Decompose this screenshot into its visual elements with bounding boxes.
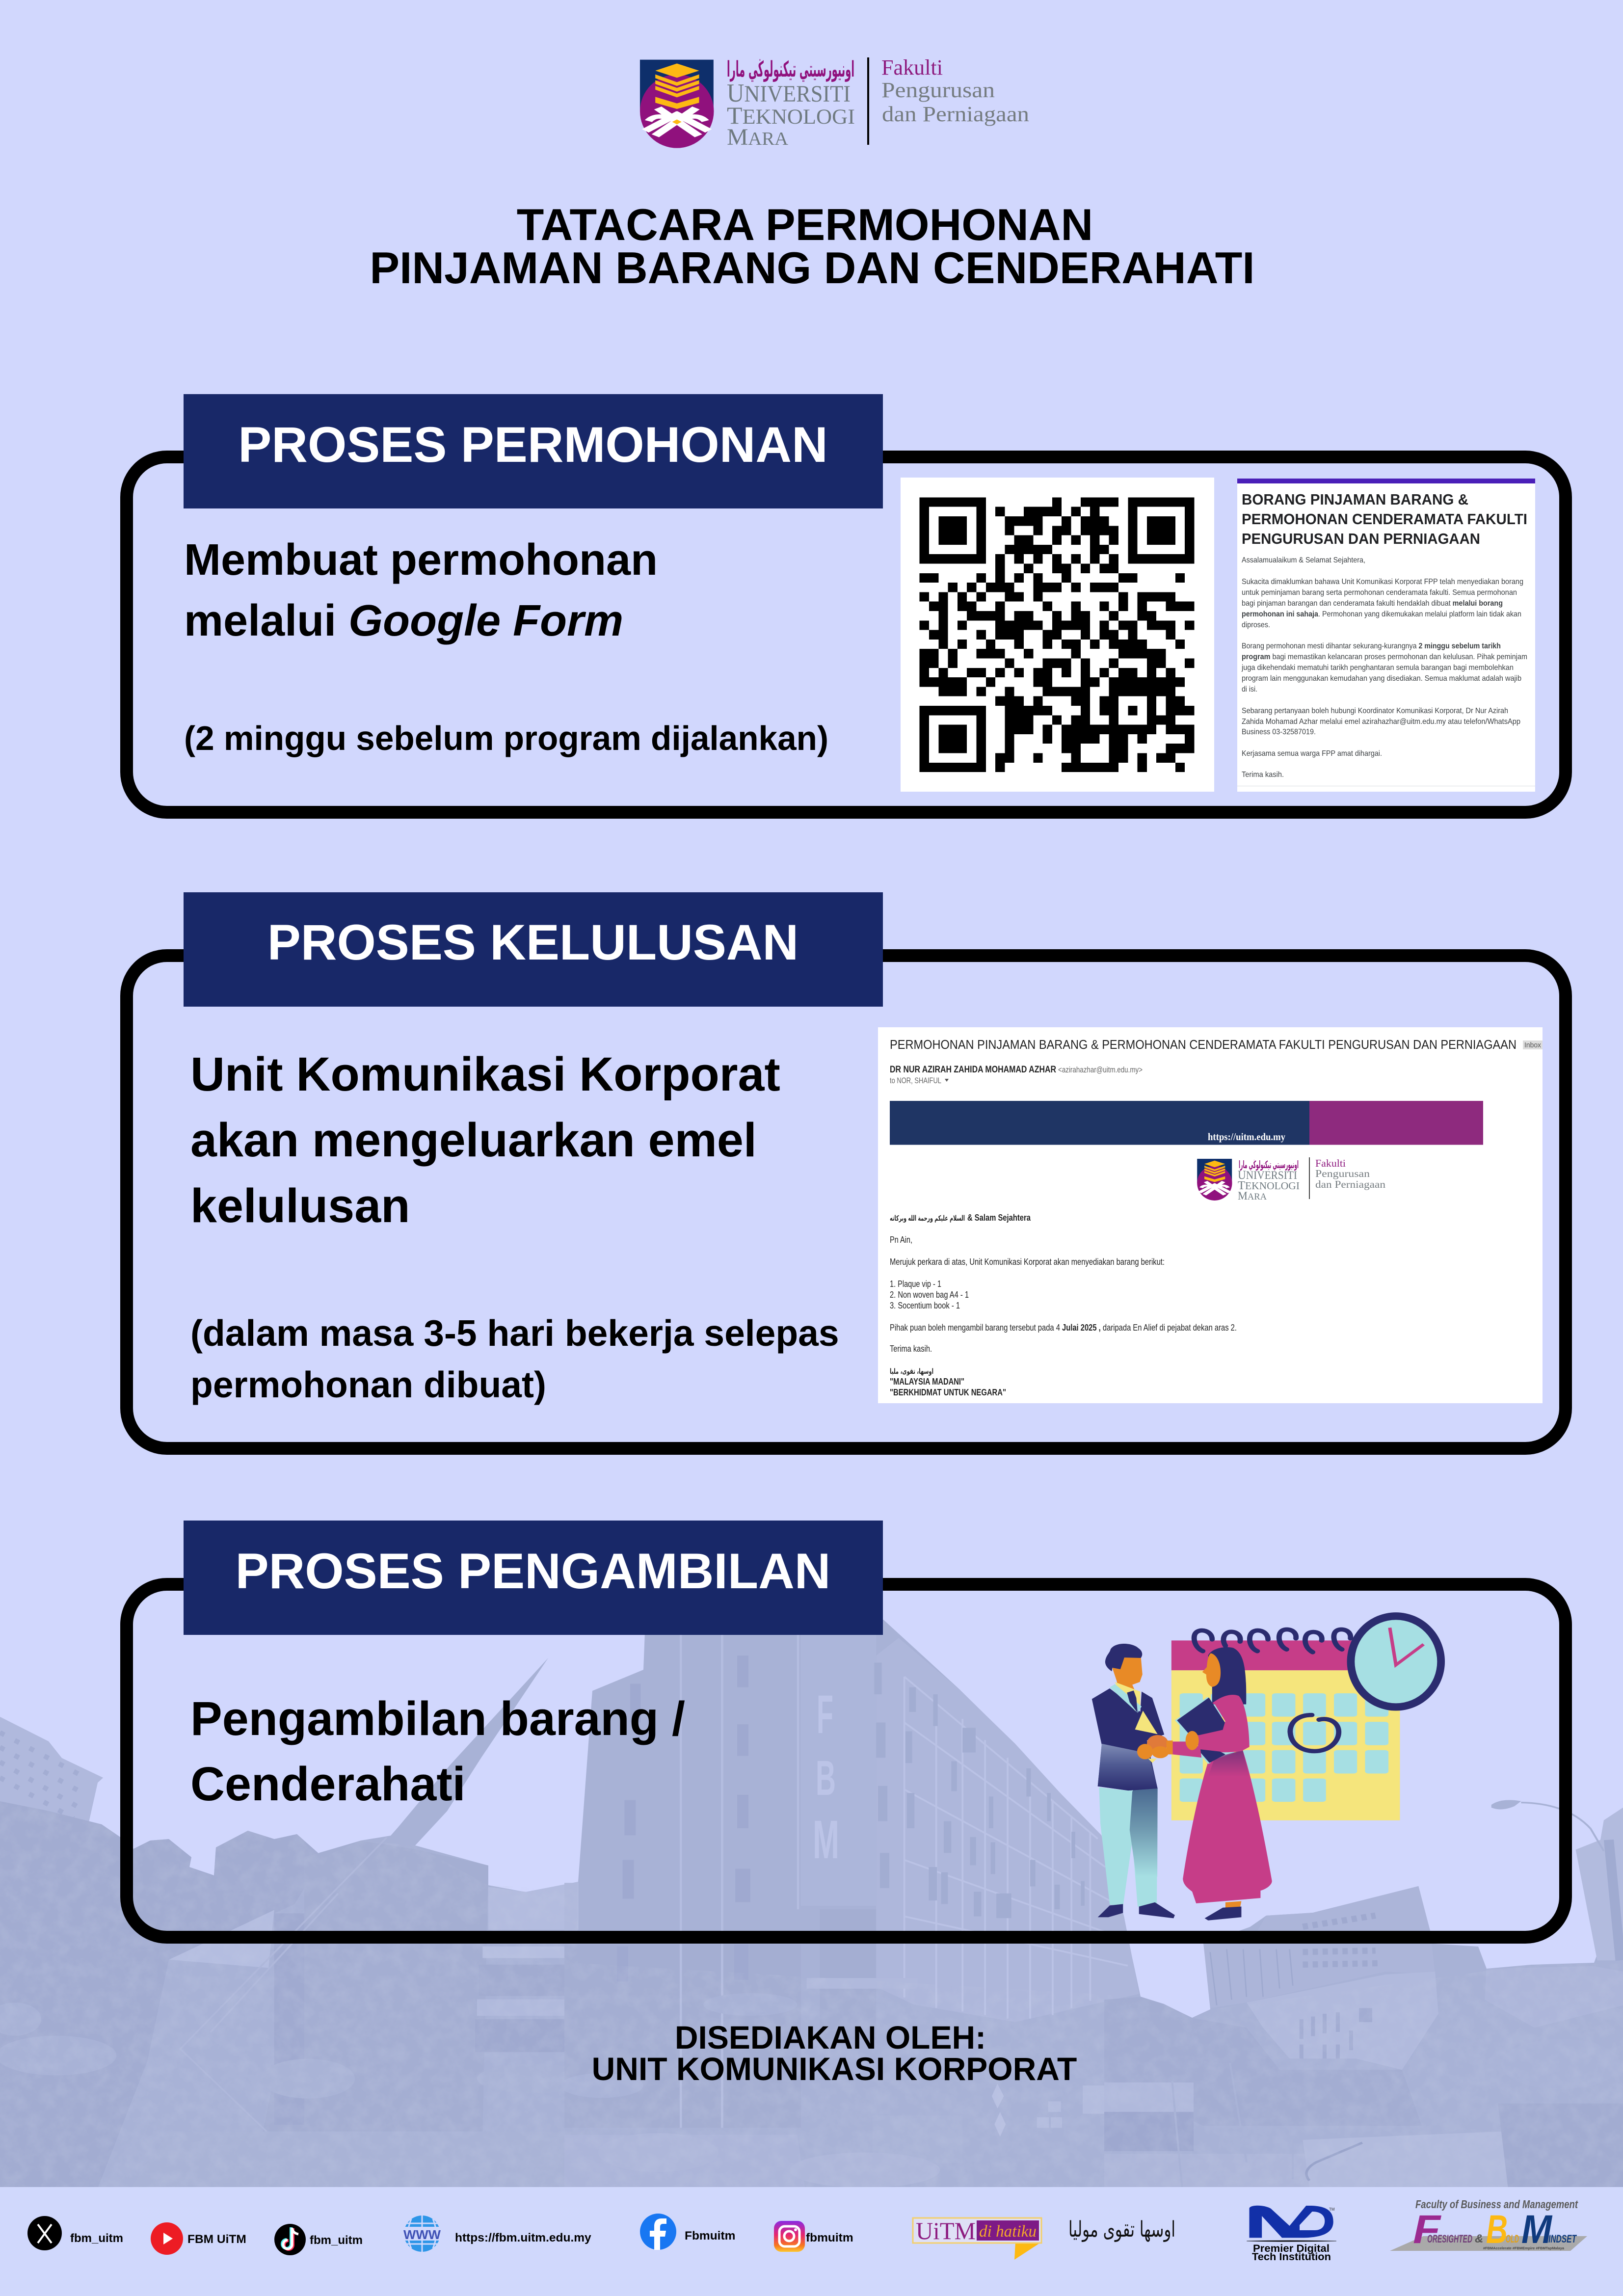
text: kelulusan instructions: kelulusan xyxy=(190,1179,410,1232)
social: Instagram: fbmuitm xyxy=(806,2231,853,2244)
FBM letters on building: F xyxy=(817,1684,833,1745)
form screenshot: program lain menggunakan kemudahan yang disediakan. Semua maklumat adalah wajib xyxy=(1242,674,1521,683)
logo: Foresighted and Bold Mindset xyxy=(1390,2198,1587,2252)
logo: UiTM di hatiku xyxy=(913,2217,1041,2260)
figure: woman xyxy=(1172,1647,1272,1921)
logo: Foresighted and Bold Mindset: B xyxy=(1486,2207,1508,2252)
form screenshot: di isi. xyxy=(1242,685,1257,694)
icon: email logo: Pengurusan xyxy=(1315,1168,1370,1179)
email banner: https://uitm.edu.my xyxy=(1208,1131,1285,1143)
email screenshot: PERMOHONAN PINJAMAN BARANG & PERMOHONAN CENDERAMATA FAKULTI PENGURUSAN DAN PERNIAGAAN xyxy=(890,1037,1517,1052)
text: permohonan instructions: melalui Google Form xyxy=(184,596,623,645)
credit: disediakan oleh: DISEDIAKAN OLEH: xyxy=(675,2019,986,2056)
text: pengambilan barang xyxy=(190,1692,685,1811)
icon: email logo: TEKNOLOGI xyxy=(1238,1179,1300,1192)
email body: Merujuk perkara di atas, Unit Komunikasi Korporat akan menyediakan barang berikut: xyxy=(890,1257,1165,1267)
text: pengambilan barang: Cenderahati xyxy=(190,1757,466,1811)
icon: email logo: dan Perniagaan xyxy=(1315,1178,1386,1190)
icon: email logo: MARA xyxy=(1238,1190,1267,1202)
social: Facebook xyxy=(640,2214,735,2250)
logo: UiTM Fakulti Pengurusan dan Perniagaan: TEKNOLOGI xyxy=(727,102,855,129)
social: website: WWW xyxy=(403,2227,441,2242)
logo: UiTM Fakulti Pengurusan dan Perniagaan: UNIVERSITI xyxy=(727,79,851,107)
email body: & Salam Sejahtera xyxy=(967,1213,1031,1223)
logo: UiTM Fakulti Pengurusan dan Perniagaan xyxy=(640,55,1029,150)
text: kelulusan instructions xyxy=(190,1047,839,1405)
email body: 3. Socentium book - 1 xyxy=(890,1301,960,1310)
form screenshot: diproses. xyxy=(1242,621,1270,629)
icon: email logo xyxy=(1197,1157,1386,1202)
social: TikTok: fbm_uitm xyxy=(310,2234,363,2247)
logo: UiTM Fakulti Pengurusan dan Perniagaan: dan Perniagaan xyxy=(882,102,1029,126)
form screenshot: Sukacita dimaklumkan bahawa Unit Komunikasi Korporat FPP telah menyediakan borang xyxy=(1242,578,1523,586)
email screenshot: to NOR, SHAIFUL xyxy=(890,1076,941,1085)
social: YouTube xyxy=(151,2222,246,2255)
form screenshot: Kerjasama semua warga FPP amat dihargai. xyxy=(1242,749,1382,758)
form screenshot: program bagi memastikan kelancaran proses permohonan dan kelulusan. Pihak peminjam xyxy=(1242,653,1527,661)
FBM letters on building: M xyxy=(813,1810,839,1870)
email banner xyxy=(890,1101,1483,1145)
icon: UiTM shield xyxy=(640,60,714,148)
text: permohonan instructions: Membuat permohonan xyxy=(184,535,658,585)
form screenshot: PENGURUSAN DAN PERNIAGAAN xyxy=(1242,530,1480,547)
logo: Foresighted and Bold Mindset: Faculty of Business and Management xyxy=(1415,2198,1578,2211)
figure: man xyxy=(1092,1644,1175,1918)
social: website xyxy=(402,2216,591,2252)
text: kelulusan instructions: permohonan dibuat) xyxy=(190,1364,546,1405)
heading tab: proses kelulusan: PROSES KELULUSAN xyxy=(267,914,798,970)
form screenshot xyxy=(1237,479,1535,792)
logo: MD Premier Digital Tech Institution: Premier Digital xyxy=(1253,2243,1330,2254)
form screenshot: Zahida Mohamad Azhar melalui emel azirahazhar@uitm.edu.my atau telefon/WhatsApp xyxy=(1242,718,1520,726)
panel: proses pengambilan xyxy=(127,1521,1566,1937)
logo: UiTM Fakulti Pengurusan dan Perniagaan: MARA xyxy=(727,124,789,150)
icon: handshake xyxy=(1137,1731,1199,1759)
title: PINJAMAN BARANG DAN CENDERAHATI xyxy=(370,243,1255,293)
background photo: FBM building and campus xyxy=(0,1620,1623,2188)
form screenshot: PERMOHONAN CENDERAMATA FAKULTI xyxy=(1242,510,1527,528)
email body xyxy=(890,1213,1237,1397)
centre crop details xyxy=(564,1635,1128,2136)
logo: Foresighted and Bold Mindset: INDSET xyxy=(1548,2233,1577,2245)
panel: proses kelulusan xyxy=(127,892,1566,1448)
logo: Foresighted and Bold Mindset: OLD xyxy=(1506,2233,1519,2245)
email body: "MALAYSIA MADANI" xyxy=(890,1377,964,1387)
logo: MD Premier Digital Tech Institution: TM xyxy=(1329,2207,1335,2212)
logo: Foresighted and Bold Mindset: ORESIGHTED xyxy=(1427,2233,1472,2245)
right crop details xyxy=(1104,1800,1623,2187)
text: permohonan instructions xyxy=(184,535,828,757)
social: Facebook: Fbmuitm xyxy=(685,2229,735,2243)
social: YouTube: FBM UiTM xyxy=(187,2233,246,2246)
logo: UiTM Fakulti Pengurusan dan Perniagaan: Pengurusan xyxy=(881,78,995,102)
text: kelulusan instructions: (dalam masa 3-5 hari bekerja selepas xyxy=(190,1312,839,1354)
heading tab: proses permohonan: PROSES PERMOHONAN xyxy=(238,417,828,473)
logo: UiTM di hatiku: UiTM xyxy=(916,2217,976,2244)
icon: email logo: Fakulti xyxy=(1315,1157,1346,1169)
FBM letters on building: B xyxy=(816,1751,836,1806)
form screenshot: Assalamualaikum & Selamat Sejahtera, xyxy=(1242,556,1365,564)
logo: UiTM Fakulti Pengurusan dan Perniagaan: اونيورسيتي تيكنولوڬي مارا xyxy=(727,57,854,82)
logo: Foresighted and Bold Mindset: & xyxy=(1475,2232,1483,2245)
logo: Foresighted and Bold Mindset: M xyxy=(1521,2207,1553,2252)
heading tab: proses pengambilan: PROSES PENGAMBILAN xyxy=(236,1543,830,1599)
text: kelulusan instructions: Unit Komunikasi Korporat xyxy=(190,1047,780,1101)
form screenshot: Business 03-32587019. xyxy=(1242,728,1316,736)
email body: Pn Ain, xyxy=(890,1235,912,1245)
credit: disediakan oleh xyxy=(592,2019,1077,2087)
email body: اوسها، تقوى، مليا xyxy=(890,1367,933,1376)
email screenshot: DR NUR AZIRAH ZAHIDA MOHAMAD AZHAR xyxy=(890,1065,1056,1075)
form screenshot: permohonan ini sahaja. Permohonan yang dikemukakan melalui platform lain tidak akan xyxy=(1242,610,1521,618)
icon: email logo: اونيورسيتي تيكنولوڬي مارا xyxy=(1239,1159,1299,1171)
logo: faculty name: Fakulti xyxy=(881,55,943,80)
title xyxy=(370,200,1255,293)
email screenshot: Inbox xyxy=(1524,1041,1541,1049)
social: TikTok xyxy=(274,2224,363,2255)
logo: MD Premier Digital Tech Institution: Tech Institution xyxy=(1252,2251,1331,2263)
email body: Pihak puan boleh mengambil barang tersebut pada 4 Julai 2025 , daripada En Alief di pejabat dekan aras 2. xyxy=(890,1323,1237,1333)
footer band xyxy=(0,2187,1623,2296)
email screenshot xyxy=(878,1027,1543,1403)
form screenshot: untuk peminjaman barang serta permohonan cenderamata fakulti. Semua permohonan xyxy=(1242,588,1517,597)
logo: Foresighted and Bold Mindset: F xyxy=(1413,2207,1441,2252)
tree and foliage texture xyxy=(17,1811,1398,2167)
social: Instagram xyxy=(774,2221,853,2252)
illustration: handshake, calendar and clock xyxy=(1092,1612,1445,1921)
email body: 2. Non woven bag A4 - 1 xyxy=(890,1290,969,1300)
text: pengambilan barang: Pengambilan barang / xyxy=(190,1692,685,1745)
email body: السلام عليكم ورحمة الله وبركاته xyxy=(890,1214,965,1223)
icon: clock xyxy=(1347,1612,1445,1711)
email body: "BERKHIDMAT UNTUK NEGARA" xyxy=(890,1388,1006,1397)
heading tab: proses pengambilan xyxy=(184,1521,883,1635)
logo: Foresighted and Bold Mindset: #FBMAccelerate #FBMEmpire #FBMTapMalaya xyxy=(1483,2247,1564,2250)
form screenshot: Sebarang pertanyaan boleh hubungi Koordinator Komunikasi Korporat, Dr Nur Azirah xyxy=(1242,707,1508,715)
icon: email logo: UNIVERSITI xyxy=(1238,1169,1297,1182)
social: website: https://fbm.uitm.edu.my xyxy=(455,2231,591,2244)
form screenshot: juga dikehendaki mematuhi tarikh penghantaran semula barangan bagi membolehkan xyxy=(1241,664,1514,672)
social: X xyxy=(27,2216,123,2250)
text: permohonan instructions: (2 minggu sebelum program dijalankan) xyxy=(184,719,828,757)
email body: Terima kasih. xyxy=(890,1344,932,1354)
title: TATACARA PERMOHONAN xyxy=(517,200,1093,250)
icon: calendar xyxy=(1171,1629,1400,1820)
left crop details xyxy=(170,1841,578,2096)
social: X: fbm_uitm xyxy=(70,2232,123,2245)
panel: proses permohonan xyxy=(127,394,1566,812)
text: kelulusan instructions: akan mengeluarkan emel xyxy=(190,1113,757,1167)
logo: Jawi motto: اوسها تقوى موليا xyxy=(1068,2217,1175,2242)
form screenshot: Borang permohonan mesti dihantar sekurang-kurangnya 2 minggu sebelum tarikh xyxy=(1242,642,1501,650)
QR code xyxy=(901,478,1214,792)
form screenshot: Terima kasih. xyxy=(1242,771,1284,779)
heading tab: proses kelulusan xyxy=(184,892,883,1007)
form screenshot: BORANG PINJAMAN BARANG & xyxy=(1242,491,1468,508)
email screenshot: <azirahazhar@uitm.edu.my> xyxy=(1058,1065,1143,1074)
heading tab: proses permohonan xyxy=(184,394,883,508)
FBM letters on building xyxy=(815,1695,837,1858)
credit: disediakan oleh: UNIT KOMUNIKASI KORPORAT xyxy=(592,2051,1077,2087)
logo: MD Premier Digital Tech Institution xyxy=(1247,2206,1336,2263)
logo: UiTM di hatiku: di hatiku xyxy=(979,2222,1037,2241)
form screenshot: bagi pinjaman barangan dan cenderamata fakulti hendaklah dibuat melalui borang xyxy=(1242,599,1503,608)
email body: 1. Plaque vip - 1 xyxy=(890,1279,941,1289)
